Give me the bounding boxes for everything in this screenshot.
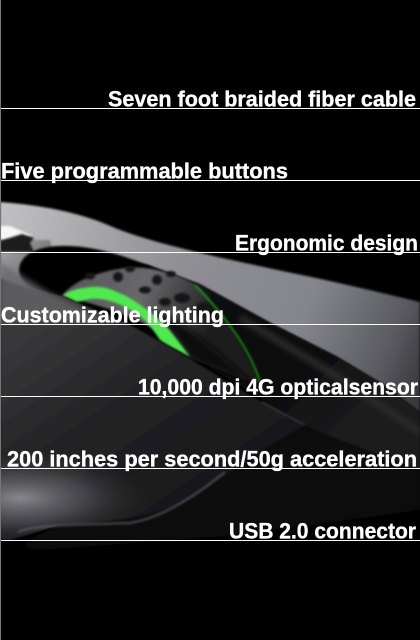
dark groove under the shell xyxy=(197,283,420,470)
left shoulder shading xyxy=(0,240,127,330)
left shoulder light over palm xyxy=(0,262,110,322)
mouse photograph xyxy=(0,202,420,550)
feature row: acceleration: 200 inches per second/50g acceleration xyxy=(7,447,417,472)
green lit ring xyxy=(63,287,190,357)
palm body xyxy=(0,278,305,540)
dark wheel side xyxy=(150,310,255,385)
wheel slot xyxy=(19,246,197,355)
thin green line xyxy=(195,285,260,382)
wheel studs xyxy=(85,266,215,318)
feature row: lighting: Customizable lighting xyxy=(1,303,224,328)
feature row: cable: Seven foot braided fiber cable xyxy=(108,87,416,112)
body glow xyxy=(1,462,127,537)
scroll wheel xyxy=(62,267,260,385)
dark notch xyxy=(0,234,34,252)
left edge strip xyxy=(0,0,1,640)
light top shell band xyxy=(0,202,420,413)
white highlight patch xyxy=(0,226,33,240)
body top crease xyxy=(262,402,305,425)
body lower rim xyxy=(18,472,225,532)
dark lower right shell xyxy=(0,395,420,550)
shell edge reflection xyxy=(240,318,420,432)
feature row: connector: USB 2.0 connector xyxy=(229,519,416,544)
feature row: buttons: Five programmable buttons xyxy=(1,159,288,184)
